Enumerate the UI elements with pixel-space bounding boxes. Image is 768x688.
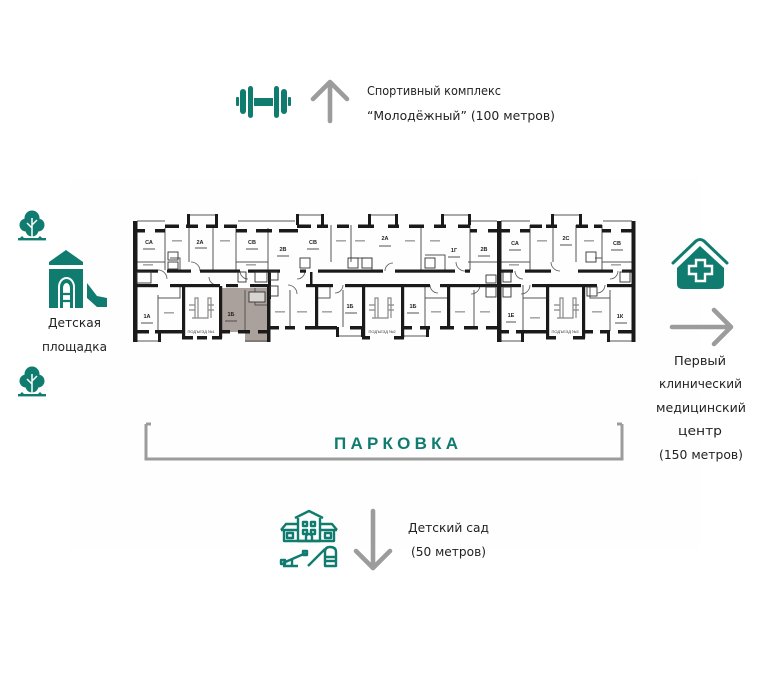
thin partitions and balconies [137, 215, 632, 341]
unit labels: 2В [279, 247, 287, 253]
text: medical center [656, 353, 746, 462]
unit labels: 1А [143, 314, 151, 320]
text: sports complex: Спортивный комплекс [367, 83, 501, 98]
unit labels: СВ [248, 240, 256, 246]
icon: hospital [673, 240, 727, 289]
lower thick walls [182, 286, 185, 338]
stairs [189, 298, 579, 318]
text: sports complex [367, 83, 555, 123]
unit labels: СА [511, 241, 519, 247]
text: kindergarten [408, 520, 489, 559]
unit labels: 1Б [409, 304, 417, 310]
top bays [187, 214, 190, 225]
unit labels: ПОДЪЕЗД №1 [187, 329, 215, 334]
unit labels: 2В [480, 247, 488, 253]
text: medical center: медицинский [656, 400, 746, 415]
unit labels: СВ [613, 241, 621, 247]
text: medical center: Первый [674, 353, 726, 368]
parking bracket [146, 424, 622, 459]
area marks [141, 240, 627, 324]
text: medical center: центр [678, 423, 722, 438]
highlighted apartment [221, 288, 268, 342]
unit labels: 2С [562, 236, 570, 242]
thick walls [133, 214, 636, 342]
unit labels: 1Г [451, 248, 458, 254]
bathrooms [137, 252, 630, 302]
icon: tree top [18, 210, 46, 240]
unit labels: 1К [617, 314, 624, 320]
unit labels: 1Б [227, 312, 235, 318]
bottom facade [137, 330, 149, 334]
unit labels: 2А [381, 236, 389, 242]
floor plan [133, 214, 636, 342]
lower balconies sides [158, 332, 161, 342]
text: sports complex: “Молодёжный” (100 метров) [367, 108, 555, 123]
icon: dumbbell [236, 86, 291, 118]
text: playground label [42, 315, 107, 354]
text: medical center: клинический [659, 376, 742, 391]
unit labels: 1Б [346, 304, 354, 310]
unit labels [143, 236, 624, 334]
text: kindergarten: (50 метров) [411, 544, 486, 559]
text: medical center: (150 метров) [659, 447, 743, 462]
icon: tree bottom [18, 366, 46, 396]
text: playground label: Детская [48, 315, 101, 330]
unit labels: ПОДЪЕЗД №2 [368, 329, 396, 334]
arrow: up [313, 82, 347, 121]
unit labels: 2А [196, 240, 204, 246]
text: playground label: площадка [42, 339, 107, 354]
icon: playground [49, 250, 107, 308]
top facade [137, 229, 145, 232]
door arcs [158, 262, 618, 294]
corridor top [137, 270, 158, 273]
unit labels: ПОДЪЕЗД №3 [551, 329, 579, 334]
arrow: right [672, 310, 731, 344]
unit labels: 1Е [508, 313, 515, 319]
corridor bottom [137, 284, 158, 287]
text: kindergarten: Детский сад [408, 520, 489, 535]
unit labels: СВ [309, 240, 317, 246]
arrow: down [356, 511, 390, 568]
icon: kindergarten [281, 511, 337, 566]
heading: parking: ПАРКОВКА [334, 434, 458, 453]
unit labels: СА [145, 240, 153, 246]
